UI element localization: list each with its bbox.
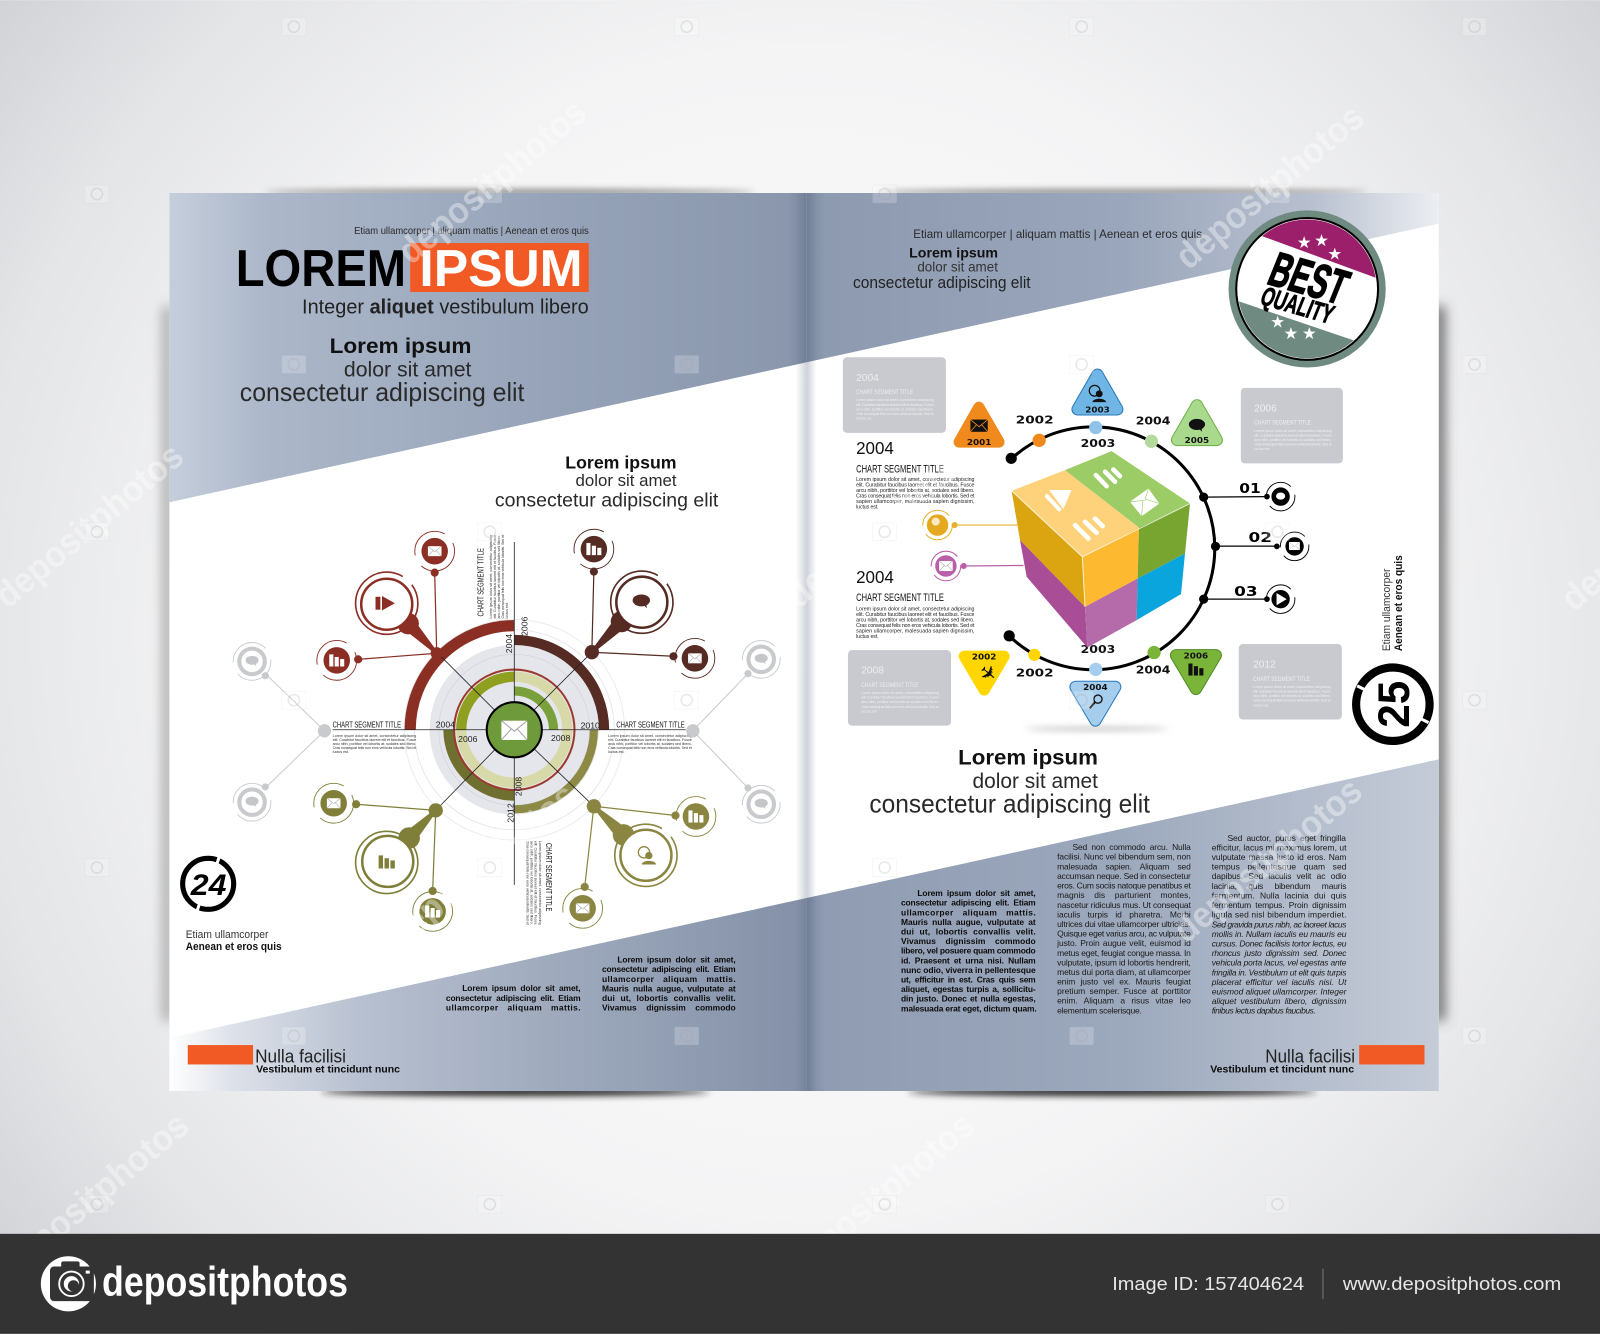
vertical caption right: Aenean et eros quis	[1393, 555, 1405, 651]
panel: right page	[806, 193, 1439, 1091]
text block: 2004 lower: elit. Curabitur faucibus laoreet elit et faucibus. Fusce	[856, 612, 975, 618]
body text: right column two: nascetur ridiculus mus. Ut consequat	[1057, 900, 1191, 910]
title word: lorem: LOREM	[236, 240, 406, 298]
triangle: 2006 green	[1176, 650, 1216, 689]
left wall magenta	[1020, 540, 1087, 648]
segment label left: CHART SEGMENT TITLE	[333, 721, 401, 730]
icon: play	[356, 572, 418, 634]
body text: left column one	[446, 983, 581, 1012]
connector: yellow icon	[923, 510, 1017, 540]
triangle: 2002 yellow	[964, 651, 1004, 690]
badge: best quality: QUALITY	[1257, 281, 1339, 330]
grey info box 2012: elit. Curabitur faucibus laoreet elit et faucibus. Fusce	[1253, 690, 1331, 694]
segment label right: CHART SEGMENT TITLE	[616, 721, 685, 730]
heading block: upper left: dolor sit amet	[344, 358, 471, 382]
grey info box 2006: arcu nibh, porttitor vel lobortis at, sodales sed libero.	[1254, 438, 1332, 442]
page number badge 25: 25	[1368, 681, 1419, 728]
body text: left column two: consectetur adipiscing elit. Etiam	[602, 964, 736, 974]
triangle: 2003 blue: 2003	[1085, 404, 1110, 414]
icon: chat	[611, 571, 673, 633]
segment label top: arcu nibh, porttitor vel lobortis at, sodales sed libero.	[497, 535, 501, 619]
grey info box 2008: luctus est.	[861, 709, 878, 713]
icon: bars	[317, 640, 357, 680]
grey info box 2008: arcu nibh, porttitor vel lobortis at, sodales sed libero.	[861, 700, 939, 704]
segment label top: elit. Curabitur faucibus laoreet elit et faucibus. Fusce	[493, 535, 497, 619]
segment label left: arcu nibh, porttitor vel lobortis at, sodales sed libero.	[333, 742, 416, 746]
heading block: right page lower: dolor sit amet	[972, 769, 1098, 793]
grey info box 2008: CHART SEGMENT TITLE	[861, 682, 918, 689]
icon: person	[615, 824, 677, 886]
heading block: upper left	[240, 334, 524, 407]
body text: right column three: lacinia, quis bibendum mauris	[1212, 881, 1346, 891]
body text: right column one: aliquet, egestas turpis a, sollicitu-	[901, 984, 1036, 994]
year labels: 2006	[520, 616, 530, 636]
arc: dark olive	[449, 730, 514, 795]
left wall yellow	[1012, 491, 1085, 607]
segment label left: elit. Curabitur faucibus laoreet elit et faucibus. Fusce	[333, 738, 416, 742]
heading block: right page lower: consectetur adipiscing elit	[869, 790, 1150, 818]
grey info box 2012: arcu nibh, porttitor vel lobortis at, sodales sed libero.	[1253, 694, 1331, 698]
top face yellow	[1012, 470, 1139, 557]
body text: right column one: consectetur adipiscing elit. Etiam	[901, 898, 1036, 908]
body text: left column two: Mauris nulla augue, vulputate at	[602, 983, 736, 993]
page number badge 24	[183, 853, 234, 914]
hub cluster: brown top-right	[574, 529, 715, 678]
text block: 2004 upper: Lorem ipsum dolor sit amet, consectetur adipiscing	[856, 477, 975, 483]
year labels: 2004	[504, 634, 514, 653]
arc: red outer	[410, 626, 514, 730]
brand name: depositphotos	[102, 1258, 348, 1305]
body text: right column two: ultrices dui vitae ullamcorper ultricies.	[1057, 919, 1191, 929]
text block: 2004 lower: luctus est.	[856, 634, 879, 640]
panel: left page	[169, 193, 806, 1091]
segment label bottom: Lorem ipsum dolor sit amet, consectetur adipiscing	[538, 841, 542, 925]
cube icon: play	[1047, 490, 1071, 509]
body text: right column two: enim. Aliquam a risus vitae leo	[1057, 996, 1191, 1006]
body text: right column three: mollis in. Nullam iaculis eu mauris eu	[1212, 929, 1347, 939]
text block: 2004 upper	[856, 438, 975, 510]
text block: 2004 upper: CHART SEGMENT TITLE	[856, 464, 944, 476]
centre icon	[487, 702, 542, 757]
body text: right column one: Mauris nulla augue, vulputate at	[901, 917, 1036, 927]
stars: ★	[1327, 245, 1342, 263]
icon: magnifier	[1090, 695, 1102, 708]
body text: right column three: vehicula porta lacus, vel egestas ante	[1212, 958, 1347, 968]
body text: right column one	[901, 888, 1037, 1013]
title word: ipsum: IPSUM	[419, 240, 583, 298]
triangle: 2002 yellow: 2002	[972, 651, 996, 661]
body text: left column one: Lorem ipsum dolor sit amet,	[462, 983, 581, 993]
icon: camera logo	[41, 1256, 96, 1311]
text block: 2004 lower: sapien ullamcorper, malesuada sapien dignissim,	[856, 628, 974, 634]
hub cluster: olive bottom-left	[314, 783, 453, 931]
heading block: left page middle	[495, 453, 719, 511]
heading block: upper right: consectetur adipiscing elit	[853, 274, 1031, 292]
grey info box 2006: CHART SEGMENT TITLE	[1254, 420, 1311, 427]
side caption left: Aenean et eros quis	[186, 941, 282, 953]
year labels: 2003	[1081, 439, 1115, 450]
body text: right column three: vulputate massa justo id eros. Nam	[1212, 852, 1346, 862]
text block: 2004 upper: elit. Curabitur faucibus laoreet elit et faucibus. Fusce	[856, 482, 975, 488]
cube icon: bars	[1075, 470, 1120, 539]
bottom brand bar	[0, 1234, 1600, 1334]
body text: right column three: finibus lectus dapibus faucibus.	[1212, 1005, 1316, 1015]
orange tab right	[1359, 1045, 1424, 1064]
triangle: 2005 green: 2005	[1185, 435, 1210, 445]
heading block: left page middle: Lorem ipsum	[565, 453, 677, 473]
year labels: 2008	[513, 777, 523, 796]
watermarks: depositphotos	[1165, 769, 1370, 950]
year labels: 2012	[505, 803, 515, 823]
orange title box	[410, 243, 589, 292]
body text: right column three	[1211, 833, 1348, 1015]
body text: right column two: enim justo vel ex. Mauris feugiat	[1057, 977, 1191, 987]
top face green	[1065, 451, 1190, 528]
top grey band right	[806, 193, 1439, 362]
heading block: left page middle: consectetur adipiscing elit	[495, 489, 719, 511]
brochure shadows	[163, 189, 1445, 1096]
arc: dark brown	[514, 640, 604, 730]
segment label right: elit. Curabitur faucibus laoreet elit et faucibus. Fusce	[608, 738, 692, 742]
green band	[1238, 301, 1354, 358]
heading block: upper right: dolor sit amet	[917, 260, 998, 276]
segment label left	[333, 721, 416, 754]
segment label bottom: elit. Curabitur faucibus laoreet elit et faucibus. Fusce	[534, 841, 538, 925]
segment label left: luctus est.	[333, 750, 349, 754]
body text: right column two: facilisi. Nunc vel bibendum sem, non	[1057, 852, 1191, 862]
text block: 2004 lower: CHART SEGMENT TITLE	[856, 592, 944, 604]
text block: 2004 upper: luctus est.	[856, 504, 879, 510]
front light magenta	[1085, 579, 1138, 648]
grey info box 2012	[1239, 644, 1342, 720]
text block: 2004 upper: Cras consequat felis non eros vehicula lobortis. Sed et	[856, 493, 975, 499]
timeline callout 03	[1199, 585, 1295, 613]
grey info box 2008: elit. Curabitur faucibus laoreet elit et faucibus. Fusce	[861, 696, 939, 700]
badge text: BEST	[1261, 243, 1356, 315]
timeline callout 02: 02	[1248, 531, 1272, 546]
grey info box 2006: elit. Curabitur faucibus laoreet elit et faucibus. Fusce	[1254, 433, 1332, 437]
connector: magenta icon	[931, 551, 1023, 581]
grey info box 2006: Cras consequat felis non eros vehicula lobortis. Sed et	[1254, 443, 1332, 447]
footer right: Vestibulum et tincidunt nunc	[1210, 1065, 1354, 1076]
segment label bottom: arcu nibh, porttitor vel lobortis at, sodales sed libero.	[530, 841, 534, 925]
grey info box 2006	[1241, 388, 1343, 463]
segment label bottom	[526, 841, 553, 925]
vertical caption right	[1381, 555, 1405, 651]
footer right	[1210, 1045, 1424, 1076]
body text: right column three: dapibus. Sed iaculis velit ac odio	[1212, 871, 1347, 881]
body text: right column one: ut, efficitur in est. Cras quis sem	[901, 975, 1036, 985]
subtitle: Integer aliquet vestibulum libero	[302, 296, 589, 318]
body text: right column two	[1056, 842, 1191, 1015]
heading block: left page middle: dolor sit amet	[576, 472, 677, 490]
grey info box 2006: luctus est.	[1254, 447, 1270, 451]
badge: best quality	[1228, 210, 1386, 368]
body text: right column two: metus dui porta diam, at ullamcorper	[1057, 967, 1191, 977]
grey info box 2006: Lorem ipsum dolor sit amet, consectetur adipiscing	[1254, 429, 1332, 433]
segment label top: Lorem ipsum dolor sit amet, consectetur adipiscing	[489, 535, 493, 619]
grey info box 2008: 2008	[861, 666, 884, 677]
grey info box 2004: Lorem ipsum dolor sit amet, consectetur adipiscing	[856, 398, 934, 402]
text block: 2004 lower: 2004	[856, 567, 894, 587]
text block: 2004 lower: Lorem ipsum dolor sit amet, consectetur adipiscing	[856, 606, 975, 612]
body text: right column one: malesuada erat eget, dictum quam.	[901, 1003, 1037, 1013]
segment label left: Cras consequat felis non eros vehicula lobortis. Sed et	[333, 746, 416, 750]
body text: right column one: Vivamus dignissim commodo	[901, 936, 1036, 946]
body text: right column two: metus eget, feugiat congue massa. In	[1057, 948, 1191, 958]
body text: left column two: Lorem ipsum dolor sit amet,	[617, 954, 736, 964]
body text: right column two: Quisque eget varius arcu, ac vulputate	[1057, 929, 1191, 939]
year labels: 2002	[1016, 416, 1054, 427]
segment label top: luctus est.	[505, 602, 509, 619]
body text: right column three: aliquet vestibulum libero, dignissim	[1212, 996, 1346, 1006]
grey info box 2004: arcu nibh, porttitor vel lobortis at, sodales sed libero.	[856, 407, 934, 411]
body text: right column two: Sed non commodo arcu. Nulla	[1072, 842, 1191, 852]
grey info box 2004: Cras consequat felis non eros vehicula lobortis. Sed et	[856, 412, 934, 416]
grey info box 2004	[843, 357, 946, 433]
body text: left column two: ullamcorper aliquam mattis.	[602, 974, 736, 984]
grey hub right	[686, 640, 780, 823]
text block: 2004 lower: arcu nibh, porttitor vel lobortis at, sodales sed libero.	[856, 617, 974, 623]
icon: bars large	[356, 831, 418, 894]
grey info box 2004: 2004	[856, 373, 879, 384]
body text: right column two: vulputate, ipsum id lobortis hendrerit,	[1057, 957, 1191, 967]
body text: left column two: dui ut, lobortis convallis velit.	[602, 993, 736, 1003]
body text: right column two: eros. Cum sociis natoque penatibus et	[1057, 881, 1191, 891]
footer right: Nulla facilisi	[1265, 1045, 1355, 1066]
stars: ★	[1314, 232, 1329, 250]
timeline callout 02	[1211, 531, 1309, 561]
grey info box 2012: Lorem ipsum dolor sit amet, consectetur adipiscing	[1253, 685, 1331, 689]
body text: right column two: elementum scelerisque.	[1057, 1005, 1142, 1015]
triangle: 2001 orange	[959, 407, 999, 447]
icon: plane: ✈	[974, 659, 1002, 688]
text block: 2004 lower: Cras consequat felis non eros vehicula lobortis. Sed et	[856, 623, 975, 629]
body text: right column two: malesuada sapien. Aliquam sed	[1057, 861, 1191, 871]
body text: left column two: Vivamus dignissim commodo	[602, 1002, 736, 1012]
triangle: 2006 green: 2006	[1184, 650, 1209, 660]
watermarks: depositphotos	[1167, 96, 1372, 277]
body text: right column two: accumsan neque. Sed in consectetur	[1057, 871, 1191, 881]
body text: left column two	[602, 954, 736, 1012]
grey hub left	[233, 643, 331, 821]
segment label right: Lorem ipsum dolor sit amet, consectetur adipiscing	[608, 734, 692, 738]
year labels	[436, 616, 600, 823]
image id: Image ID: 157404624	[1112, 1273, 1304, 1294]
front green	[1138, 504, 1190, 579]
timeline callout 01: 01	[1239, 482, 1261, 497]
body text: right column three: Sed gravida purus nibh, ac laoreet lacus	[1212, 919, 1347, 929]
front orange	[1082, 528, 1139, 607]
triangle: 2003 blue	[1078, 375, 1117, 414]
orange tab left	[188, 1045, 253, 1064]
triangle: 2004 blue	[1076, 682, 1115, 721]
front blue	[1137, 554, 1185, 620]
stars: ★	[1270, 314, 1285, 332]
bottom grey band left	[169, 898, 806, 1091]
vertical caption right: Etiam ullamcorper	[1381, 568, 1393, 651]
icon: mail	[675, 638, 715, 678]
top strapline right: Etiam ullamcorper | aliquam mattis | Aenean et eros quis	[913, 227, 1202, 241]
icon: bars	[413, 891, 453, 931]
icon: bars	[574, 529, 614, 569]
magenta band	[1262, 220, 1376, 278]
icon: bars	[676, 797, 716, 836]
segment label right: Cras consequat felis non eros vehicula lobortis. Sed et	[608, 746, 692, 750]
grey info box 2012: luctus est.	[1253, 703, 1269, 707]
grey info box 2004: luctus est.	[856, 417, 872, 421]
grey info box 2012: Cras consequat felis non eros vehicula lobortis. Sed et	[1253, 699, 1331, 703]
footer left: Nulla facilisi	[255, 1045, 346, 1066]
page number badge 25	[1356, 668, 1430, 741]
grey info box 2008	[848, 650, 951, 726]
icon: mail	[314, 783, 354, 823]
grey info box 2012: CHART SEGMENT TITLE	[1253, 676, 1310, 683]
year labels: 2002	[1016, 669, 1054, 680]
watermark camera icons	[85, 18, 1487, 1213]
body text: right column two: iaculis turpis id pharetra. Morbi	[1057, 909, 1191, 919]
stars: ★	[1297, 234, 1311, 252]
body text: right column one: id. Praesent et urna nisi. Nullam	[901, 955, 1036, 965]
grey info box 2006: 2006	[1254, 403, 1277, 414]
text block: 2004 upper: sapien ullamcorper, malesuada sapien dignissim,	[856, 499, 974, 505]
body text: right column three: placerat efficitur vel iaculis nisi. Ut	[1211, 977, 1347, 987]
grey info box 2012: 2012	[1253, 660, 1276, 671]
icon: mail	[415, 531, 455, 571]
segment label right: arcu nibh, porttitor vel lobortis at, sodales sed libero.	[608, 742, 692, 746]
body text: right column three: fermentum tempus. Proin dignissim	[1212, 900, 1346, 910]
cube shadow	[1026, 727, 1168, 730]
grey info box 2004: elit. Curabitur faucibus laoreet elit et faucibus. Fusce	[856, 403, 934, 407]
triangle: 2004 blue: 2004	[1083, 682, 1108, 692]
segment label right: luctus est.	[608, 750, 624, 754]
body text: right column three: efficitur, lacus mi maximus lorem, ut	[1212, 842, 1347, 852]
body text: right column three: tempus pellentesque quam sed	[1212, 862, 1347, 872]
segment label right	[608, 721, 692, 754]
text block: 2004 upper: 2004	[856, 438, 894, 458]
triangle: 2001 orange: 2001	[967, 437, 992, 447]
year labels: 2004	[1136, 666, 1170, 677]
text block: 2004 upper: arcu nibh, porttitor vel lobortis at, sodales sed libero.	[856, 488, 974, 494]
heading block: upper left: Lorem ipsum	[330, 334, 471, 358]
year labels: 2003	[1081, 645, 1115, 656]
grey info box 2008: Cras consequat felis non eros vehicula lobortis. Sed et	[861, 705, 939, 709]
body text: right column three: fermentum. Nulla lacinia dui quis	[1212, 891, 1346, 901]
watermarks: depositphotos	[379, 775, 584, 956]
heading block: upper right: Lorem ipsum	[909, 245, 998, 261]
segment label top	[477, 535, 509, 619]
year labels: 2008	[551, 733, 570, 743]
side caption left: Etiam ullamcorper	[186, 929, 269, 941]
body text: right column one: nunc odio, viverra in pellentesque	[901, 965, 1036, 975]
body text: right column three: rhoncus justo dignissim sed. Donec	[1212, 948, 1347, 958]
body text: right column one: din justo. Donec et nulla egestas,	[901, 994, 1036, 1004]
heading block: right page lower: Lorem ipsum	[958, 745, 1098, 769]
timeline callout 03: 03	[1234, 585, 1258, 600]
hub cluster: olive bottom-right	[563, 797, 716, 928]
heading block: upper left: consectetur adipiscing elit	[240, 379, 524, 407]
footer left	[188, 1045, 400, 1076]
triangle: 2005 green	[1177, 405, 1217, 445]
bottom grey band right	[806, 759, 1439, 1091]
axis and spokes	[333, 542, 686, 885]
body text: right column three: euismod aliquet ullamcorper. Integer	[1212, 986, 1348, 996]
grey info box 2008: Lorem ipsum dolor sit amet, consectetur adipiscing	[861, 691, 939, 695]
year labels: 2010	[581, 721, 600, 731]
watermarks: depositphotos	[777, 1104, 982, 1285]
footer left: Vestibulum et tincidunt nunc	[256, 1065, 400, 1076]
stars: ★	[1302, 325, 1316, 343]
watermarks: depositphotos	[777, 435, 982, 616]
arc: olive	[514, 730, 594, 809]
text block: 2004 lower	[856, 567, 975, 640]
top strapline left: Etiam ullamcorper | aliquam mattis | Aenean et eros quis	[354, 226, 589, 237]
body text: right column three: cursus. Donec facilisis tortor lectus, eu	[1212, 938, 1347, 948]
body text: right column three: Sed auctor, purus eget fringilla	[1228, 833, 1346, 843]
watermarks: depositphotos	[390, 91, 594, 272]
hub cluster: red top-left	[317, 531, 455, 680]
year labels	[1016, 416, 1170, 680]
body text: right column one: ullamcorper aliquam mattis.	[901, 907, 1036, 917]
icon: mail	[563, 888, 603, 928]
title	[236, 240, 589, 298]
body text: right column three: fringilla in. Vestibulum ut elit quis turpis	[1212, 967, 1347, 977]
timeline ring	[1004, 416, 1215, 680]
body text: left column one: consectetur adipiscing elit. Etiam	[446, 993, 581, 1003]
side caption left	[186, 929, 282, 953]
cube	[1012, 451, 1190, 648]
year labels: 2006	[458, 734, 478, 744]
stars	[1270, 232, 1342, 343]
body text: right column one: libero, vel posuere quam commodo	[901, 946, 1036, 956]
segment label bottom: CHART SEGMENT TITLE	[544, 843, 553, 912]
inner rings	[454, 670, 574, 790]
body text: right column two: magnis dis parturient montes,	[1057, 890, 1191, 900]
segment label top: Cras consequat felis non eros vehicula lobortis. Sed et	[501, 535, 505, 619]
body text: right column two: justo. Proin augue velit, euismod id	[1056, 938, 1191, 948]
segment label top: CHART SEGMENT TITLE	[477, 548, 486, 616]
segment label left: Lorem ipsum dolor sit amet, consectetur adipiscing	[333, 734, 416, 738]
body text: right column one: dui ut, lobortis convallis velit.	[901, 926, 1036, 936]
timeline callout 01	[1199, 482, 1295, 511]
heading block: upper right	[853, 245, 1031, 292]
stars: ★	[1284, 325, 1298, 343]
year labels: 2004	[1136, 417, 1170, 428]
heading block: right page lower	[869, 745, 1150, 818]
radial chart	[333, 535, 692, 925]
body text: left column one: ullamcorper aliquam mattis.	[446, 1002, 581, 1012]
cube icon: mail	[1130, 489, 1159, 516]
site url: www.depositphotos.com	[1342, 1273, 1561, 1294]
top grey band left	[169, 193, 806, 502]
segment label bottom: Cras consequat felis non eros vehicula lobortis. Sed et	[526, 841, 530, 925]
body text: right column two: pretium semper. Fusce at porttitor	[1057, 986, 1191, 996]
page number badge 24: 24	[190, 869, 227, 902]
body text: right column one: Lorem ipsum dolor sit amet,	[917, 888, 1036, 898]
grey info box 2004: CHART SEGMENT TITLE	[856, 389, 913, 396]
year labels: 2004	[436, 720, 455, 730]
body text: right column three: ligula sed nisl bibendum imperdiet.	[1212, 910, 1346, 920]
